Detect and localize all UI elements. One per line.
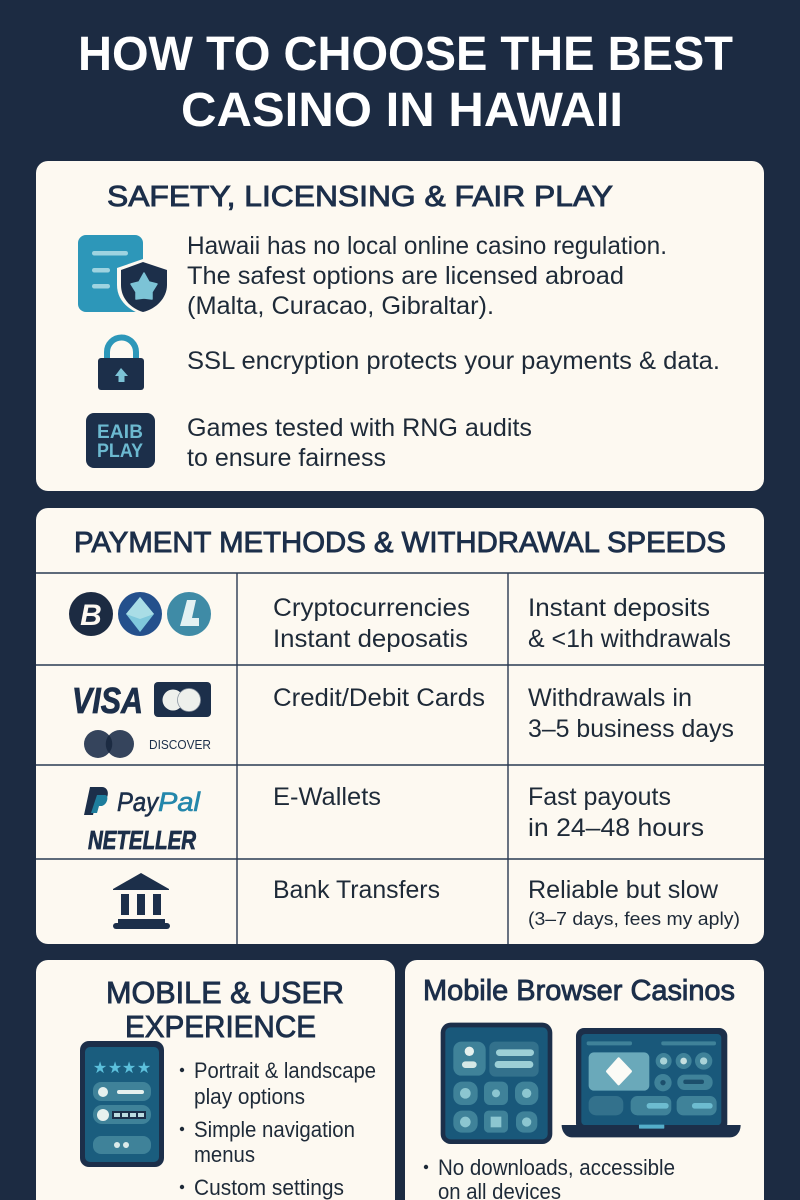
text: bank transfers: Bank Transfers bbox=[273, 876, 440, 904]
icon: padlock bbox=[98, 338, 144, 390]
text: crypto speed: & <1h withdrawals bbox=[528, 625, 731, 653]
text: rng audits bbox=[187, 414, 532, 472]
text: regulation: (Malta, Curacao, Gibraltar). bbox=[187, 292, 494, 320]
text: e-wallet speed: in 24–48 hours bbox=[528, 814, 704, 842]
text: cards speed bbox=[528, 684, 734, 743]
text: ssl: SSL encryption protects your payments & data. bbox=[187, 347, 720, 375]
list: mobile features: Portrait & landscape bbox=[194, 1058, 376, 1083]
list: mobile features: menus bbox=[194, 1142, 255, 1167]
title: CASINO IN HAWAII bbox=[181, 84, 623, 137]
icon: fair play badge bbox=[86, 413, 155, 468]
icon: phone: ★ bbox=[122, 1060, 136, 1077]
icon: phone: ★ bbox=[108, 1060, 122, 1077]
icon: e-wallet logos: Pal bbox=[158, 787, 201, 817]
text: e-wallet speed: Fast payouts bbox=[528, 783, 671, 811]
icon: bank building bbox=[113, 873, 170, 929]
heading: mobile and user experience: MOBILE & USER bbox=[106, 975, 344, 1010]
text: crypto speed: Instant deposits bbox=[528, 594, 710, 622]
icon: cryptocurrency coins bbox=[69, 592, 211, 636]
heading: mobile and user experience bbox=[106, 975, 344, 1044]
text: regulation: The safest options are licensed abroad bbox=[187, 262, 624, 290]
heading: mobile and user experience: EXPERIENCE bbox=[125, 1009, 316, 1044]
heading: mobile browser casinos: Mobile Browser Casinos bbox=[423, 975, 735, 1007]
text: bank speed: (3–7 days, fees my aply) bbox=[528, 909, 740, 929]
text: regulation: Hawaii has no local online casino regulation. bbox=[187, 232, 667, 260]
icon: fair play badge: EAIB bbox=[97, 422, 143, 443]
icon: card logos: DISCOVER bbox=[149, 738, 211, 752]
text: rng audits: Games tested with RNG audits bbox=[187, 414, 532, 442]
icon: e-wallet logos: Pay bbox=[117, 787, 159, 817]
heading: safety: SAFETY, LICENSING & FAIR PLAY bbox=[107, 181, 613, 213]
text: bank speed bbox=[528, 876, 740, 929]
list: mobile features: play options bbox=[194, 1084, 305, 1109]
text: bank speed: Reliable but slow bbox=[528, 876, 719, 904]
icon: e-wallet logos bbox=[84, 787, 201, 855]
text: cards speed: Withdrawals in bbox=[528, 684, 692, 712]
list: mobile features bbox=[180, 1058, 376, 1200]
icon: phone: ★ bbox=[93, 1060, 107, 1077]
text: cryptocurrencies bbox=[273, 594, 470, 653]
icon: tablet bbox=[441, 1023, 552, 1144]
icon: phone bbox=[80, 1041, 164, 1167]
text: e-wallets: E-Wallets bbox=[273, 783, 381, 811]
text: e-wallet speed bbox=[528, 783, 704, 842]
icon: card logos bbox=[72, 680, 211, 758]
icon: licence document with shield bbox=[78, 235, 170, 315]
text: rng audits: to ensure fairness bbox=[187, 444, 386, 472]
icon: card logos: VISA bbox=[72, 680, 143, 721]
list: mobile features: Custom settings bbox=[194, 1175, 344, 1200]
panel: safety, licensing and fair play bbox=[36, 161, 764, 491]
icon: cryptocurrency coins: B bbox=[80, 599, 102, 632]
text: crypto speed bbox=[528, 594, 731, 653]
icon: e-wallet logos: NETELLER bbox=[88, 825, 196, 855]
list: browser features bbox=[424, 1155, 675, 1200]
text: cards speed: 3–5 business days bbox=[528, 715, 734, 743]
text: regulation bbox=[187, 232, 667, 320]
panel: mobile and user experience bbox=[36, 960, 395, 1200]
title bbox=[78, 28, 733, 137]
text: cards: Credit/Debit Cards bbox=[273, 684, 485, 712]
icon: fair play badge: PLAY bbox=[97, 441, 143, 462]
icon: phone: ★ bbox=[137, 1060, 151, 1077]
icon: laptop bbox=[562, 1028, 741, 1137]
list: browser features: No downloads, accessible bbox=[438, 1155, 675, 1180]
text: cryptocurrencies: Cryptocurrencies bbox=[273, 594, 470, 622]
list: mobile features: Simple navigation bbox=[194, 1117, 355, 1142]
panel: mobile browser casinos bbox=[405, 960, 764, 1200]
text: cryptocurrencies: Instant deposatis bbox=[273, 625, 468, 653]
title: HOW TO CHOOSE THE BEST bbox=[78, 28, 733, 81]
panel: payment methods and withdrawal speeds bbox=[36, 508, 764, 944]
heading: payment methods: PAYMENT METHODS & WITHDRAWAL SPEEDS bbox=[74, 527, 726, 559]
